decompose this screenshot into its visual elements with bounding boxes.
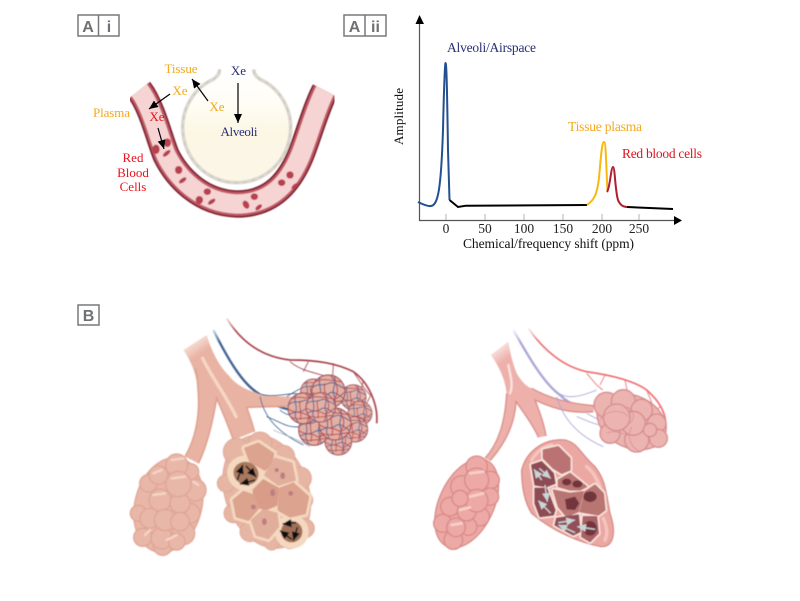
red blood cells bbox=[152, 138, 300, 211]
left cluster highlights bbox=[145, 458, 198, 540]
label: Red Blood Cells: Cells bbox=[120, 179, 146, 194]
inner cells bbox=[532, 447, 605, 542]
left collapsed cluster bbox=[422, 449, 511, 558]
label: Xe tissue: Xe bbox=[209, 99, 225, 114]
capillary-wrapped alveoli cluster bbox=[288, 375, 372, 455]
dark cores bbox=[562, 479, 597, 536]
tick labels bbox=[443, 221, 649, 236]
label: Red Blood Cells: Blood bbox=[117, 165, 149, 180]
spectrum: tail bbox=[627, 207, 673, 209]
artery branches bbox=[587, 373, 660, 418]
gas arrows bbox=[237, 465, 297, 541]
illustration: diseased alveoli bbox=[422, 328, 675, 558]
left cluster highlights bbox=[452, 472, 483, 525]
vein branches bbox=[552, 388, 607, 447]
artery branches bbox=[290, 362, 372, 410]
tick labels: 100 bbox=[514, 221, 534, 236]
spectrum: alveoli peak bbox=[418, 63, 450, 206]
x axis title: Chemical/frequency shift (ppm) bbox=[463, 236, 634, 251]
panel: A ii spectrum chart bbox=[344, 15, 702, 251]
label: Tissue: Tissue bbox=[164, 61, 198, 76]
panel: B healthy and diseased lungs bbox=[78, 305, 675, 561]
axes bbox=[416, 15, 682, 225]
upper-right collapsed cluster bbox=[588, 383, 675, 460]
badge: A ii bbox=[344, 15, 386, 36]
tick labels: 50 bbox=[478, 221, 492, 236]
outer wall bbox=[522, 440, 613, 547]
gas arrows bbox=[534, 468, 595, 533]
artery bbox=[528, 328, 666, 430]
cell septa bbox=[532, 447, 605, 542]
badge: A ii: A bbox=[349, 19, 361, 36]
y axis title: Amplitude bbox=[391, 88, 406, 145]
cross-section cluster bbox=[522, 440, 613, 547]
cell spots bbox=[251, 468, 293, 525]
outer lobes bbox=[208, 423, 326, 561]
diagram: capillary and alveolus bbox=[139, 69, 325, 211]
label: Xe alveolar: Xe bbox=[231, 63, 246, 78]
label: Tissue plasma: Tissue plasma bbox=[568, 119, 642, 134]
label: Alveoli/Airspace: Alveoli/Airspace bbox=[447, 40, 536, 55]
arrow: xe to tissue bbox=[192, 79, 208, 101]
badge: B: B bbox=[83, 308, 94, 325]
arrow: xe into alveoli bbox=[237, 83, 239, 123]
arrow: xe to plasma bbox=[149, 94, 170, 109]
tick labels: 200 bbox=[592, 221, 612, 236]
badge: A i: i bbox=[107, 19, 111, 36]
label: Plasma: Plasma bbox=[93, 105, 130, 120]
vein bbox=[513, 330, 593, 407]
label: Red blood cells: Red blood cells bbox=[622, 146, 702, 161]
spectrum: tissue plasma peak bbox=[587, 142, 608, 205]
label: Alveoli: Alveoli bbox=[220, 124, 258, 139]
airway bbox=[183, 335, 292, 463]
tick labels: 150 bbox=[553, 221, 573, 236]
capillary vessel bbox=[139, 90, 325, 204]
alveolus sac bbox=[183, 69, 291, 183]
vein branches bbox=[255, 387, 310, 447]
inner cells bbox=[230, 443, 308, 542]
tick labels: 250 bbox=[629, 221, 649, 236]
spectrum: baseline bbox=[450, 200, 587, 207]
spectrum: red blood cell peak bbox=[607, 167, 627, 207]
badge: A ii: ii bbox=[371, 19, 380, 36]
badge: A i: A bbox=[82, 19, 94, 36]
badge: B bbox=[78, 305, 99, 325]
airway bbox=[485, 342, 594, 461]
cell septa bbox=[227, 443, 308, 545]
upper-right cluster folds bbox=[600, 407, 640, 452]
badge: A i bbox=[78, 15, 119, 36]
lobe highlights bbox=[532, 445, 607, 540]
panel: A i alveolus gas exchange bbox=[78, 15, 325, 211]
illustration: healthy alveoli bbox=[124, 318, 377, 561]
tick labels: 0 bbox=[443, 221, 450, 236]
left solid alveoli cluster bbox=[124, 450, 213, 560]
label: Xe red blood cells: Xe bbox=[149, 109, 165, 124]
label: Red Blood Cells: Red bbox=[123, 150, 144, 165]
vein bbox=[213, 330, 293, 410]
arrow: xe to red blood cells bbox=[158, 128, 164, 149]
artery bbox=[227, 318, 377, 423]
label: Xe plasma: Xe bbox=[172, 83, 188, 98]
right cross-section alveoli cluster bbox=[208, 423, 326, 561]
